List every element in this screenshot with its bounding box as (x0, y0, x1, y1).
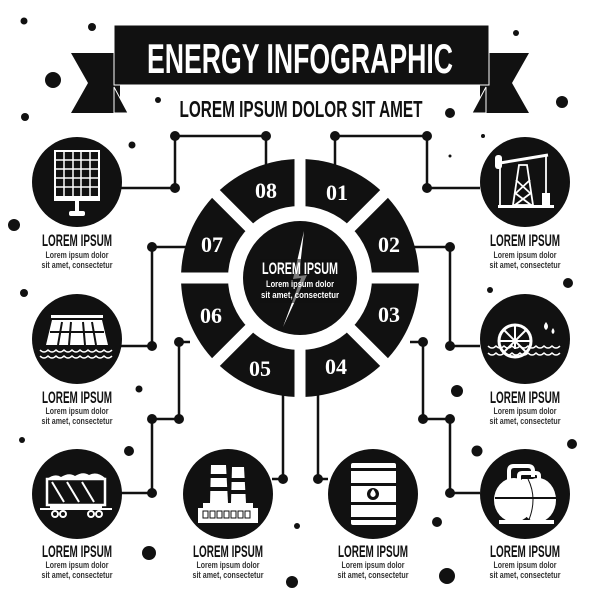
labels: Lorem ipsum dolor (494, 250, 557, 260)
labels: Lorem ipsum dolor (494, 560, 557, 570)
connector lines (121, 136, 480, 493)
labels: LOREM IPSUM (42, 231, 112, 250)
labels: Lorem ipsum dolor (46, 560, 109, 570)
labels: Lorem ipsum dolor (46, 406, 109, 416)
title banner (71, 25, 529, 113)
center circle: sit amet, consectetur (261, 290, 339, 300)
labels: LOREM IPSUM (42, 388, 112, 407)
ring chart: 07 (201, 232, 223, 257)
labels: sit amet, consectetur (42, 416, 113, 426)
labels: sit amet, consectetur (490, 260, 561, 270)
item: coal wagon (32, 449, 122, 539)
labels: Lorem ipsum dolor (46, 250, 109, 260)
labels: Lorem ipsum dolor (342, 560, 405, 570)
labels: sit amet, consectetur (42, 260, 113, 270)
labels: LOREM IPSUM (193, 542, 263, 561)
ring chart: 01 (326, 180, 348, 205)
ring chart (172, 150, 428, 406)
item: oil pump (480, 137, 570, 227)
item: hydro dam (32, 294, 122, 384)
center circle (243, 221, 357, 335)
item: water wheel (480, 294, 570, 384)
labels: sit amet, consectetur (490, 416, 561, 426)
labels: sit amet, consectetur (338, 570, 409, 580)
labels: Lorem ipsum dolor (196, 560, 260, 570)
labels: sit amet, consectetur (192, 570, 264, 580)
subtitle: LOREM IPSUM DOLOR SIT AMET (180, 96, 422, 122)
ring chart: 03 (378, 302, 400, 327)
item: gas tank (480, 449, 570, 539)
labels: sit amet, consectetur (490, 570, 561, 580)
labels (42, 231, 561, 580)
center circle: LOREM IPSUM (262, 259, 338, 278)
item: solar panel (32, 137, 122, 227)
ring chart: 08 (255, 178, 277, 203)
labels: LOREM IPSUM (338, 542, 408, 561)
item: power plant (183, 449, 273, 539)
ring chart: 05 (249, 356, 271, 381)
ring chart: 04 (325, 354, 347, 379)
ring chart: 06 (200, 303, 222, 328)
labels: sit amet, consectetur (42, 570, 113, 580)
center circle: Lorem ipsum dolor (266, 279, 334, 289)
ring chart: 02 (378, 232, 400, 257)
item: oil barrel (328, 449, 418, 539)
labels: LOREM IPSUM (42, 542, 112, 561)
labels: Lorem ipsum dolor (494, 406, 557, 416)
